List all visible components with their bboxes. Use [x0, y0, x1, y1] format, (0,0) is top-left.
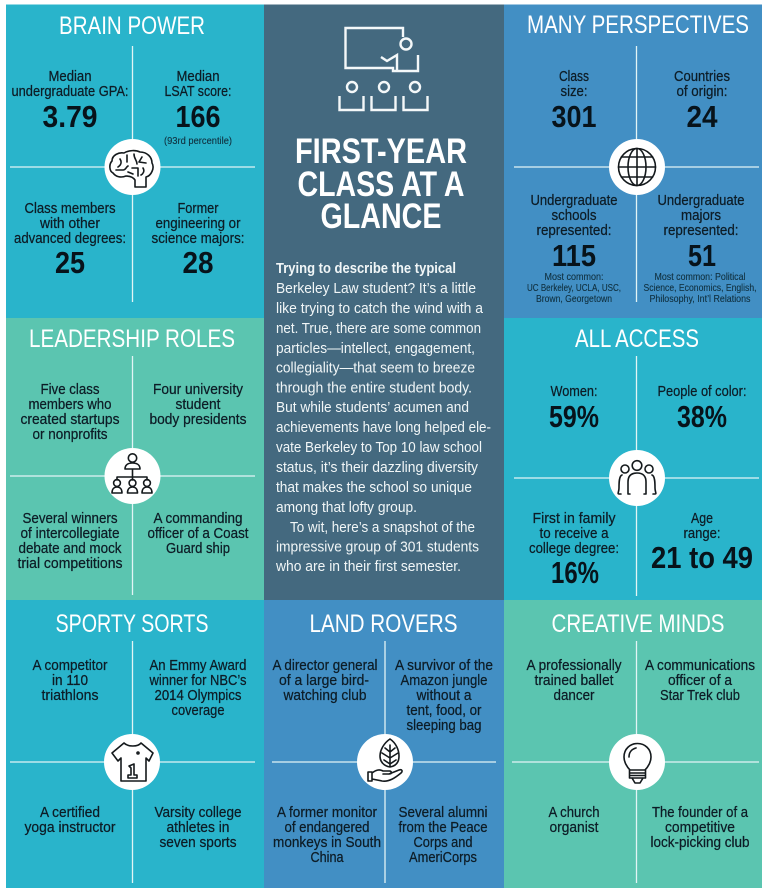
icon: leaf in hand	[357, 734, 413, 790]
panel: land rovers	[264, 600, 504, 888]
stat: median LSAT: (93rd percentile)	[164, 135, 232, 147]
icon: jersey	[104, 734, 160, 790]
title: GLANCE	[320, 197, 442, 236]
item: bird-watching: watching club	[283, 687, 366, 704]
stat: undergraduate majors	[644, 192, 756, 305]
body text: through the entire student body.	[276, 380, 472, 396]
item: lock-picking club: lock-picking club	[650, 834, 750, 851]
icon: classroom presentation	[340, 28, 428, 110]
stat: people of color	[658, 383, 746, 434]
item: debate winners: debate and mock	[18, 540, 122, 557]
item: church organist: A church	[548, 804, 600, 821]
body text: collegiality—that seem to breeze	[276, 360, 475, 376]
item: varsity athletes: seven sports	[160, 834, 236, 851]
item: debate winners: Several winners	[22, 510, 118, 527]
stat: class size: size:	[560, 83, 588, 100]
heading: leadership roles: LEADERSHIP ROLES	[29, 325, 235, 353]
stat: class size: 301	[552, 99, 596, 134]
body text: that makes the school so unique	[276, 480, 472, 496]
heading: brain power: BRAIN POWER	[59, 12, 205, 40]
stat: undergraduate schools: schools	[552, 207, 596, 224]
stat: countries of origin: of origin:	[676, 83, 728, 100]
body text: vate Berkeley to Top 10 law school	[276, 440, 482, 456]
item: emmy winner: coverage	[172, 702, 224, 719]
item: startups: Five class	[40, 381, 100, 398]
title: CLASS AT A	[298, 165, 464, 204]
stat: median LSAT	[164, 68, 232, 147]
panel: leadership roles	[6, 318, 264, 600]
item: peace corps: AmeriCorps	[409, 849, 477, 866]
stat: age range: range:	[684, 525, 720, 542]
panel: brain power	[6, 4, 264, 318]
body text: particles—intellect, engagement,	[276, 341, 475, 357]
stat: median GPA: 3.79	[42, 99, 98, 134]
stat: undergraduate majors: Undergraduate	[658, 192, 744, 209]
stat: undergraduate majors: represented:	[664, 222, 738, 239]
item: bird-watching: A director general	[272, 657, 378, 674]
stat: undergraduate schools: UC Berkeley, UCLA, USC,	[527, 282, 621, 294]
body text: impressive group of 301 students	[276, 540, 479, 556]
stat: first in family	[529, 510, 619, 590]
item: yoga instructor: A certified	[40, 804, 100, 821]
stat: engineering majors	[152, 200, 244, 280]
item: startups: or nonprofits	[32, 426, 108, 443]
panel: many perspectives	[504, 4, 762, 318]
stat: women	[549, 383, 599, 434]
stat: undergraduate schools	[527, 192, 621, 305]
stat: median GPA	[12, 68, 128, 134]
item: startups: created startups	[20, 411, 120, 428]
stat: first in family: 16%	[551, 555, 599, 590]
stat: engineering majors: engineering or	[156, 215, 241, 232]
item: startups: members who	[28, 396, 112, 413]
item: student body presidents: Four university	[153, 381, 243, 398]
item: lock-picking club	[650, 804, 750, 851]
stat: class size: Class	[559, 68, 589, 85]
heading: all access: ALL ACCESS	[575, 325, 699, 353]
item: lock-picking club: The founder of a	[652, 804, 749, 821]
item: triathlons	[32, 657, 108, 704]
stat: undergraduate schools: 115	[552, 238, 596, 273]
item: monkey monitor	[273, 804, 381, 866]
stat: engineering majors: science majors:	[152, 230, 244, 247]
stat: undergraduate schools: represented:	[536, 222, 612, 239]
item: student body presidents: student	[176, 396, 221, 413]
item: star trek club	[645, 657, 755, 704]
stat: median GPA: undergraduate GPA:	[12, 83, 128, 100]
body text: Berkeley Law student? It’s a little	[276, 281, 476, 297]
item: student body presidents	[150, 381, 246, 428]
item: emmy winner: 2014 Olympics	[154, 687, 242, 704]
item: emmy winner	[149, 657, 246, 719]
stat: median LSAT: LSAT score:	[164, 83, 232, 100]
stat: advanced degrees: advanced degrees:	[14, 230, 126, 247]
item: amazon survivor: Amazon jungle	[400, 672, 488, 689]
stat: median LSAT: 166	[176, 99, 220, 134]
item: varsity athletes: Varsity college	[154, 804, 242, 821]
stat: countries of origin: Countries	[674, 68, 730, 85]
panel: sporty sorts	[6, 600, 264, 888]
stat: advanced degrees: 25	[55, 245, 85, 280]
body text: like trying to catch the wind with a	[276, 301, 484, 317]
stat: people of color: People of color:	[658, 383, 746, 400]
body text: achievements have long helped ele-	[276, 420, 491, 436]
stat: class size	[552, 68, 596, 134]
item: star trek club: Star Trek club	[660, 687, 740, 704]
item: lock-picking club: competitive	[665, 819, 735, 836]
icon: light bulb	[609, 734, 665, 790]
stat: engineering majors: Former	[178, 200, 218, 217]
stat: median GPA: Median	[48, 68, 92, 85]
item: yoga instructor: yoga instructor	[24, 819, 116, 836]
title	[295, 132, 467, 236]
body text: To wit, here’s a snapshot of the	[290, 520, 475, 536]
stat: first in family: college degree:	[529, 540, 619, 557]
heading: sporty sorts: SPORTY SORTS	[56, 610, 208, 638]
stat: age range: 21 to 49	[651, 540, 753, 575]
icon: globe	[609, 139, 665, 195]
item: debate winners: trial competitions	[18, 555, 122, 572]
item: bird-watching	[272, 657, 378, 704]
item: star trek club: A communications	[645, 657, 755, 674]
item: coast guard officer: officer of a Coast	[148, 525, 249, 542]
stat: advanced degrees: with other	[39, 215, 100, 232]
stat: countries of origin: 24	[686, 99, 718, 134]
item: peace corps: Corps and	[414, 834, 472, 851]
item: amazon survivor: tent, food, or	[406, 702, 482, 719]
item: ballet dancer	[526, 657, 622, 704]
item: triathlons: A competitor	[32, 657, 108, 674]
item: student body presidents: body presidents	[150, 411, 246, 428]
item: amazon survivor: sleeping bag	[406, 717, 482, 734]
stat: advanced degrees: Class members	[24, 200, 116, 217]
stat: undergraduate schools: Most common:	[544, 271, 604, 283]
item: peace corps	[398, 804, 488, 866]
stat: women: Women:	[550, 383, 598, 400]
icon: org chart	[104, 448, 160, 504]
panel: all access	[504, 318, 762, 600]
stat: median LSAT: Median	[176, 68, 220, 85]
stat: undergraduate majors: Philosophy, Int’l Relations	[650, 293, 750, 305]
stat: undergraduate schools: Undergraduate	[530, 192, 618, 209]
title: FIRST-YEAR	[295, 132, 467, 171]
stat: women: 59%	[549, 399, 599, 434]
item: debate winners	[18, 510, 122, 572]
panel: center intro	[264, 4, 504, 600]
item: coast guard officer: A commanding	[154, 510, 242, 527]
item: ballet dancer: trained ballet	[534, 672, 614, 689]
item: coast guard officer	[148, 510, 249, 557]
item: peace corps: from the Peace	[398, 819, 488, 836]
item: amazon survivor: without a	[416, 687, 472, 704]
stat: people of color: 38%	[677, 399, 727, 434]
item: yoga instructor	[24, 804, 116, 836]
icon: brain	[104, 139, 160, 195]
item: startups	[20, 381, 120, 443]
body text: Trying to describe the typical	[276, 261, 456, 277]
item: varsity athletes	[154, 804, 242, 851]
item: debate winners: of intercollegiate	[20, 525, 120, 542]
item: star trek club: officer of a	[668, 672, 733, 689]
stat: first in family: to receive a	[540, 525, 609, 542]
item: emmy winner: winner for NBC’s	[149, 672, 246, 689]
item: peace corps: Several alumni	[398, 804, 488, 821]
item: varsity athletes: athletes in	[166, 819, 230, 836]
item: amazon survivor: A survivor of the	[395, 657, 493, 674]
item: coast guard officer: Guard ship	[166, 540, 230, 557]
stat: undergraduate majors: majors	[681, 207, 721, 224]
panel: creative minds	[504, 600, 762, 888]
item: bird-watching: of a large bird-	[279, 672, 369, 689]
item: church organist	[548, 804, 600, 836]
item: emmy winner: An Emmy Award	[150, 657, 246, 674]
body text: among that lofty group.	[276, 500, 417, 516]
stat: age range	[651, 510, 753, 575]
item: triathlons: in 110	[52, 672, 88, 689]
stat: undergraduate schools: Brown, Georgetown	[536, 293, 612, 305]
heading: creative minds: CREATIVE MINDS	[552, 610, 724, 638]
body text	[275, 261, 491, 575]
heading: land rovers: LAND ROVERS	[310, 610, 458, 638]
item: monkey monitor: China	[310, 849, 344, 866]
item: monkey monitor: of endangered	[284, 819, 370, 836]
item: ballet dancer: dancer	[554, 687, 594, 704]
item: triathlons: triathlons	[42, 687, 98, 704]
stat: undergraduate majors: Most common: Political	[654, 271, 746, 283]
body text: net. True, there are some common	[276, 321, 481, 337]
body text: But while students’ acumen and	[276, 400, 469, 416]
stat: first in family: First in family	[532, 510, 616, 527]
item: church organist: organist	[550, 819, 599, 836]
stat: engineering majors: 28	[182, 245, 214, 280]
stat: advanced degrees	[14, 200, 126, 280]
stat: age range: Age	[691, 510, 713, 527]
item: monkey monitor: monkeys in South	[273, 834, 381, 851]
item: amazon survivor	[395, 657, 493, 734]
stat: countries of origin	[674, 68, 730, 134]
item: ballet dancer: A professionally	[526, 657, 622, 674]
body text: status, it’s their dazzling diversity	[276, 460, 479, 476]
item: monkey monitor: A former monitor	[277, 804, 377, 821]
body text: who are in their first semester.	[275, 559, 461, 575]
stat: undergraduate majors: 51	[688, 238, 716, 273]
icon: group of people	[609, 450, 665, 506]
